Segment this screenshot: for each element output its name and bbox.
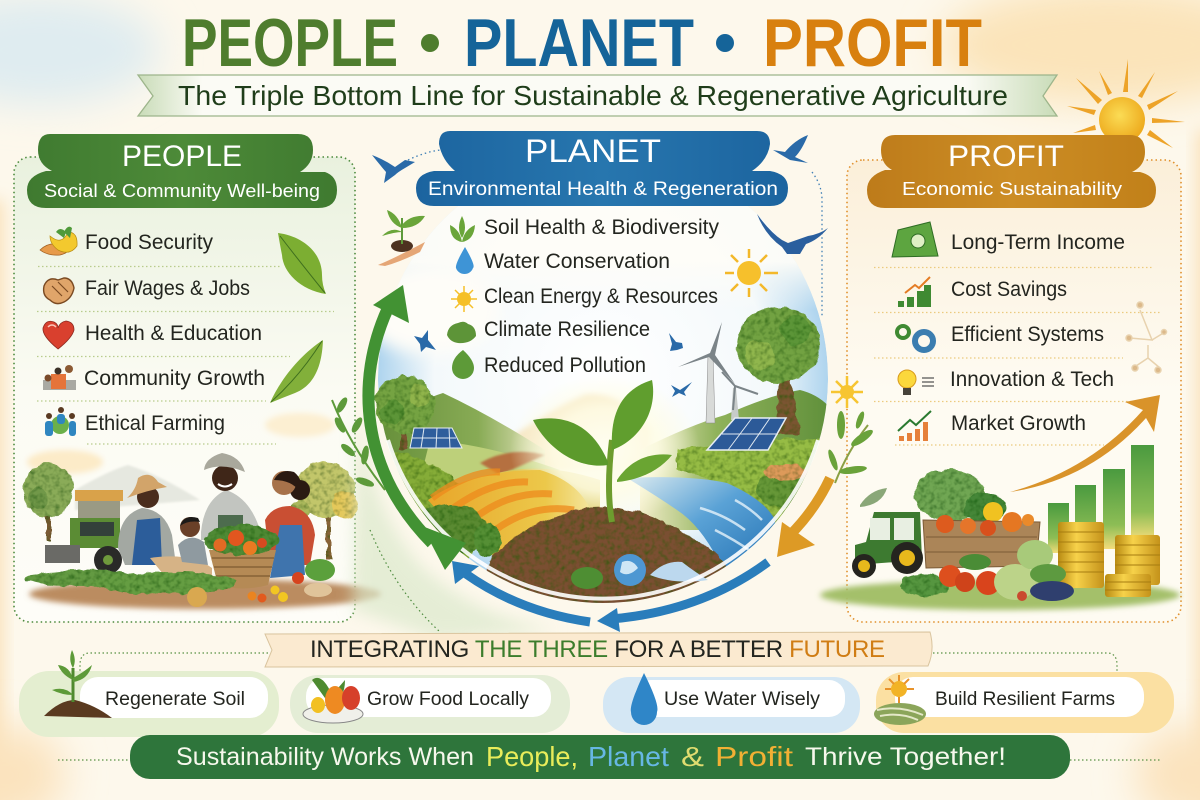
orange and yellow rows bbox=[428, 470, 596, 558]
integrating banner: INTEGRATING THE THREE FOR A BETTER FUTURE bbox=[310, 636, 885, 663]
title: PEOPLE bbox=[182, 5, 398, 81]
birds bbox=[372, 135, 828, 397]
crate of vegetables bbox=[914, 469, 1040, 568]
planet dotted connectors bbox=[408, 150, 822, 316]
integrating banner bbox=[265, 632, 932, 667]
glow bbox=[512, 386, 696, 510]
planet header bbox=[416, 131, 788, 206]
people header: PEOPLE bbox=[122, 140, 242, 173]
coin stacks bbox=[1058, 522, 1160, 597]
growth bars bbox=[1048, 445, 1154, 555]
leaf decoration lower bbox=[270, 340, 323, 403]
item: cost savings: Cost Savings bbox=[951, 278, 1067, 301]
item: efficient systems bbox=[897, 323, 1104, 350]
action: build resilient farms: Build Resilient Farms bbox=[935, 689, 1115, 710]
people header bbox=[27, 134, 337, 208]
item: fair wages and jobs: Fair Wages & Jobs bbox=[85, 277, 250, 300]
action: use water wisely: Use Water Wisely bbox=[664, 689, 821, 710]
sprig on orange arrow with sun bbox=[826, 376, 875, 483]
people header: Social & Community Well-being bbox=[44, 180, 320, 201]
panel: people bbox=[14, 134, 381, 622]
farmer man centre bbox=[201, 453, 260, 540]
planet header: PLANET bbox=[525, 133, 661, 169]
red crop band bbox=[480, 452, 545, 475]
subtitle ribbon: The Triple Bottom Line for Sustainable & Regenerative Agriculture bbox=[178, 80, 1008, 111]
closing banner: Sustainability Works When bbox=[176, 743, 474, 771]
green dotted connector bbox=[370, 530, 440, 632]
illustration: wind turbines bbox=[678, 322, 758, 423]
profit header: Economic Sustainability bbox=[902, 178, 1123, 199]
action: grow food locally: Grow Food Locally bbox=[367, 689, 530, 710]
item: reduced pollution bbox=[452, 350, 646, 379]
growth arrow bbox=[1010, 395, 1160, 492]
item: clean energy and resources: Clean Energy & Resources bbox=[484, 285, 718, 308]
arrow: orange cycle bbox=[777, 478, 830, 557]
people panel frame bbox=[14, 157, 355, 622]
tractor bbox=[852, 488, 923, 578]
icon: mid sun bbox=[725, 249, 778, 297]
action: grow food locally bbox=[290, 675, 570, 733]
dark bushes bbox=[422, 504, 486, 554]
action: use water wisely bbox=[603, 673, 860, 733]
connector dots bbox=[58, 653, 1160, 760]
child bbox=[178, 517, 208, 565]
item: food security bbox=[40, 227, 213, 255]
foreground crops bbox=[25, 559, 335, 607]
item: health and education: Health & Education bbox=[85, 322, 262, 345]
illustration: tree left bbox=[375, 376, 435, 450]
item: ethical farming: Ethical Farming bbox=[85, 412, 225, 435]
yellow field upper bbox=[498, 468, 600, 508]
item: climate resilience: Climate Resilience bbox=[484, 318, 650, 341]
closing banner: & bbox=[681, 741, 704, 772]
bank flowers bbox=[756, 464, 810, 508]
profit header: PROFIT bbox=[948, 140, 1064, 173]
farmer woman bbox=[265, 471, 315, 578]
closing banner: People, bbox=[486, 741, 578, 772]
illustration: farming family bbox=[23, 413, 381, 609]
soil mound bbox=[486, 506, 726, 603]
farmer man left bbox=[118, 475, 212, 582]
arrow: blue cycle bbox=[452, 561, 768, 632]
closing banner bbox=[130, 735, 1070, 779]
small items in soil bbox=[571, 554, 708, 589]
item: long-term income bbox=[892, 222, 1125, 257]
illustration: seedling bbox=[533, 380, 672, 522]
river bbox=[630, 477, 775, 570]
item: health and education bbox=[43, 321, 262, 349]
planet illustration bbox=[378, 206, 828, 603]
item: innovation and tech bbox=[898, 368, 1114, 395]
basket of vegetables bbox=[205, 525, 279, 588]
item: market growth bbox=[898, 411, 1086, 441]
tree left bbox=[23, 463, 73, 542]
subtitle ribbon bbox=[138, 75, 1057, 116]
action: regenerate soil bbox=[19, 650, 279, 737]
light valley field bbox=[424, 444, 559, 484]
distant peach hills bbox=[515, 392, 642, 468]
hedge near soil bbox=[473, 523, 501, 557]
item: cost savings bbox=[898, 277, 1067, 307]
icon: molecule bbox=[1126, 302, 1166, 373]
item: long-term income: Long-Term Income bbox=[951, 231, 1125, 254]
tree right bbox=[290, 462, 358, 560]
item: community growth: Community Growth bbox=[84, 367, 265, 390]
item: water conservation: Water Conservation bbox=[484, 250, 670, 273]
ring bbox=[388, 440, 818, 599]
illustration: tree right bbox=[736, 307, 820, 435]
closing banner: Profit bbox=[715, 741, 793, 772]
tractor bbox=[45, 490, 123, 574]
illustration: solar panels bbox=[410, 418, 786, 450]
action: regenerate soil: Regenerate Soil bbox=[105, 689, 245, 710]
profit dividers bbox=[874, 268, 1160, 445]
item: fair wages and jobs bbox=[44, 277, 250, 304]
sky bbox=[378, 206, 828, 603]
item: soil health and biodiversity: Soil Health & Biodiversity bbox=[484, 216, 719, 239]
closing banner: Planet bbox=[588, 741, 669, 772]
leaf decoration upper bbox=[278, 233, 326, 294]
hedges left bbox=[394, 452, 473, 558]
item: ethical farming bbox=[45, 407, 225, 436]
green wash behind cycle bbox=[352, 400, 560, 640]
hills bbox=[378, 390, 832, 530]
profit panel frame bbox=[847, 160, 1181, 622]
item: innovation and tech: Innovation & Tech bbox=[950, 368, 1114, 391]
sprig on green arrow bbox=[332, 397, 385, 490]
item: efficient systems: Efficient Systems bbox=[951, 323, 1104, 346]
arrow: green cycle bbox=[368, 285, 466, 570]
bottom section bbox=[19, 632, 1174, 779]
planet header: Environmental Health & Regeneration bbox=[428, 179, 778, 200]
vegetables foreground bbox=[900, 540, 1074, 601]
item: reduced pollution: Reduced Pollution bbox=[484, 354, 646, 377]
title bbox=[182, 5, 982, 81]
ground bbox=[29, 579, 381, 609]
right meadow bbox=[677, 439, 832, 520]
action: build resilient farms bbox=[874, 672, 1174, 733]
illustration: produce and growth bbox=[820, 395, 1180, 610]
title: PLANET bbox=[464, 5, 694, 81]
item: market growth: Market Growth bbox=[951, 412, 1086, 435]
icon: sun top right bbox=[1067, 59, 1185, 148]
icon: hand with seedling bbox=[378, 210, 425, 266]
profit header bbox=[867, 135, 1156, 208]
panel: profit bbox=[820, 135, 1181, 622]
item: food security: Food Security bbox=[85, 231, 213, 254]
people dividers bbox=[37, 266, 334, 444]
planet text group bbox=[370, 131, 828, 632]
closing banner: Thrive Together! bbox=[805, 743, 1006, 771]
title: PROFIT bbox=[763, 5, 982, 81]
